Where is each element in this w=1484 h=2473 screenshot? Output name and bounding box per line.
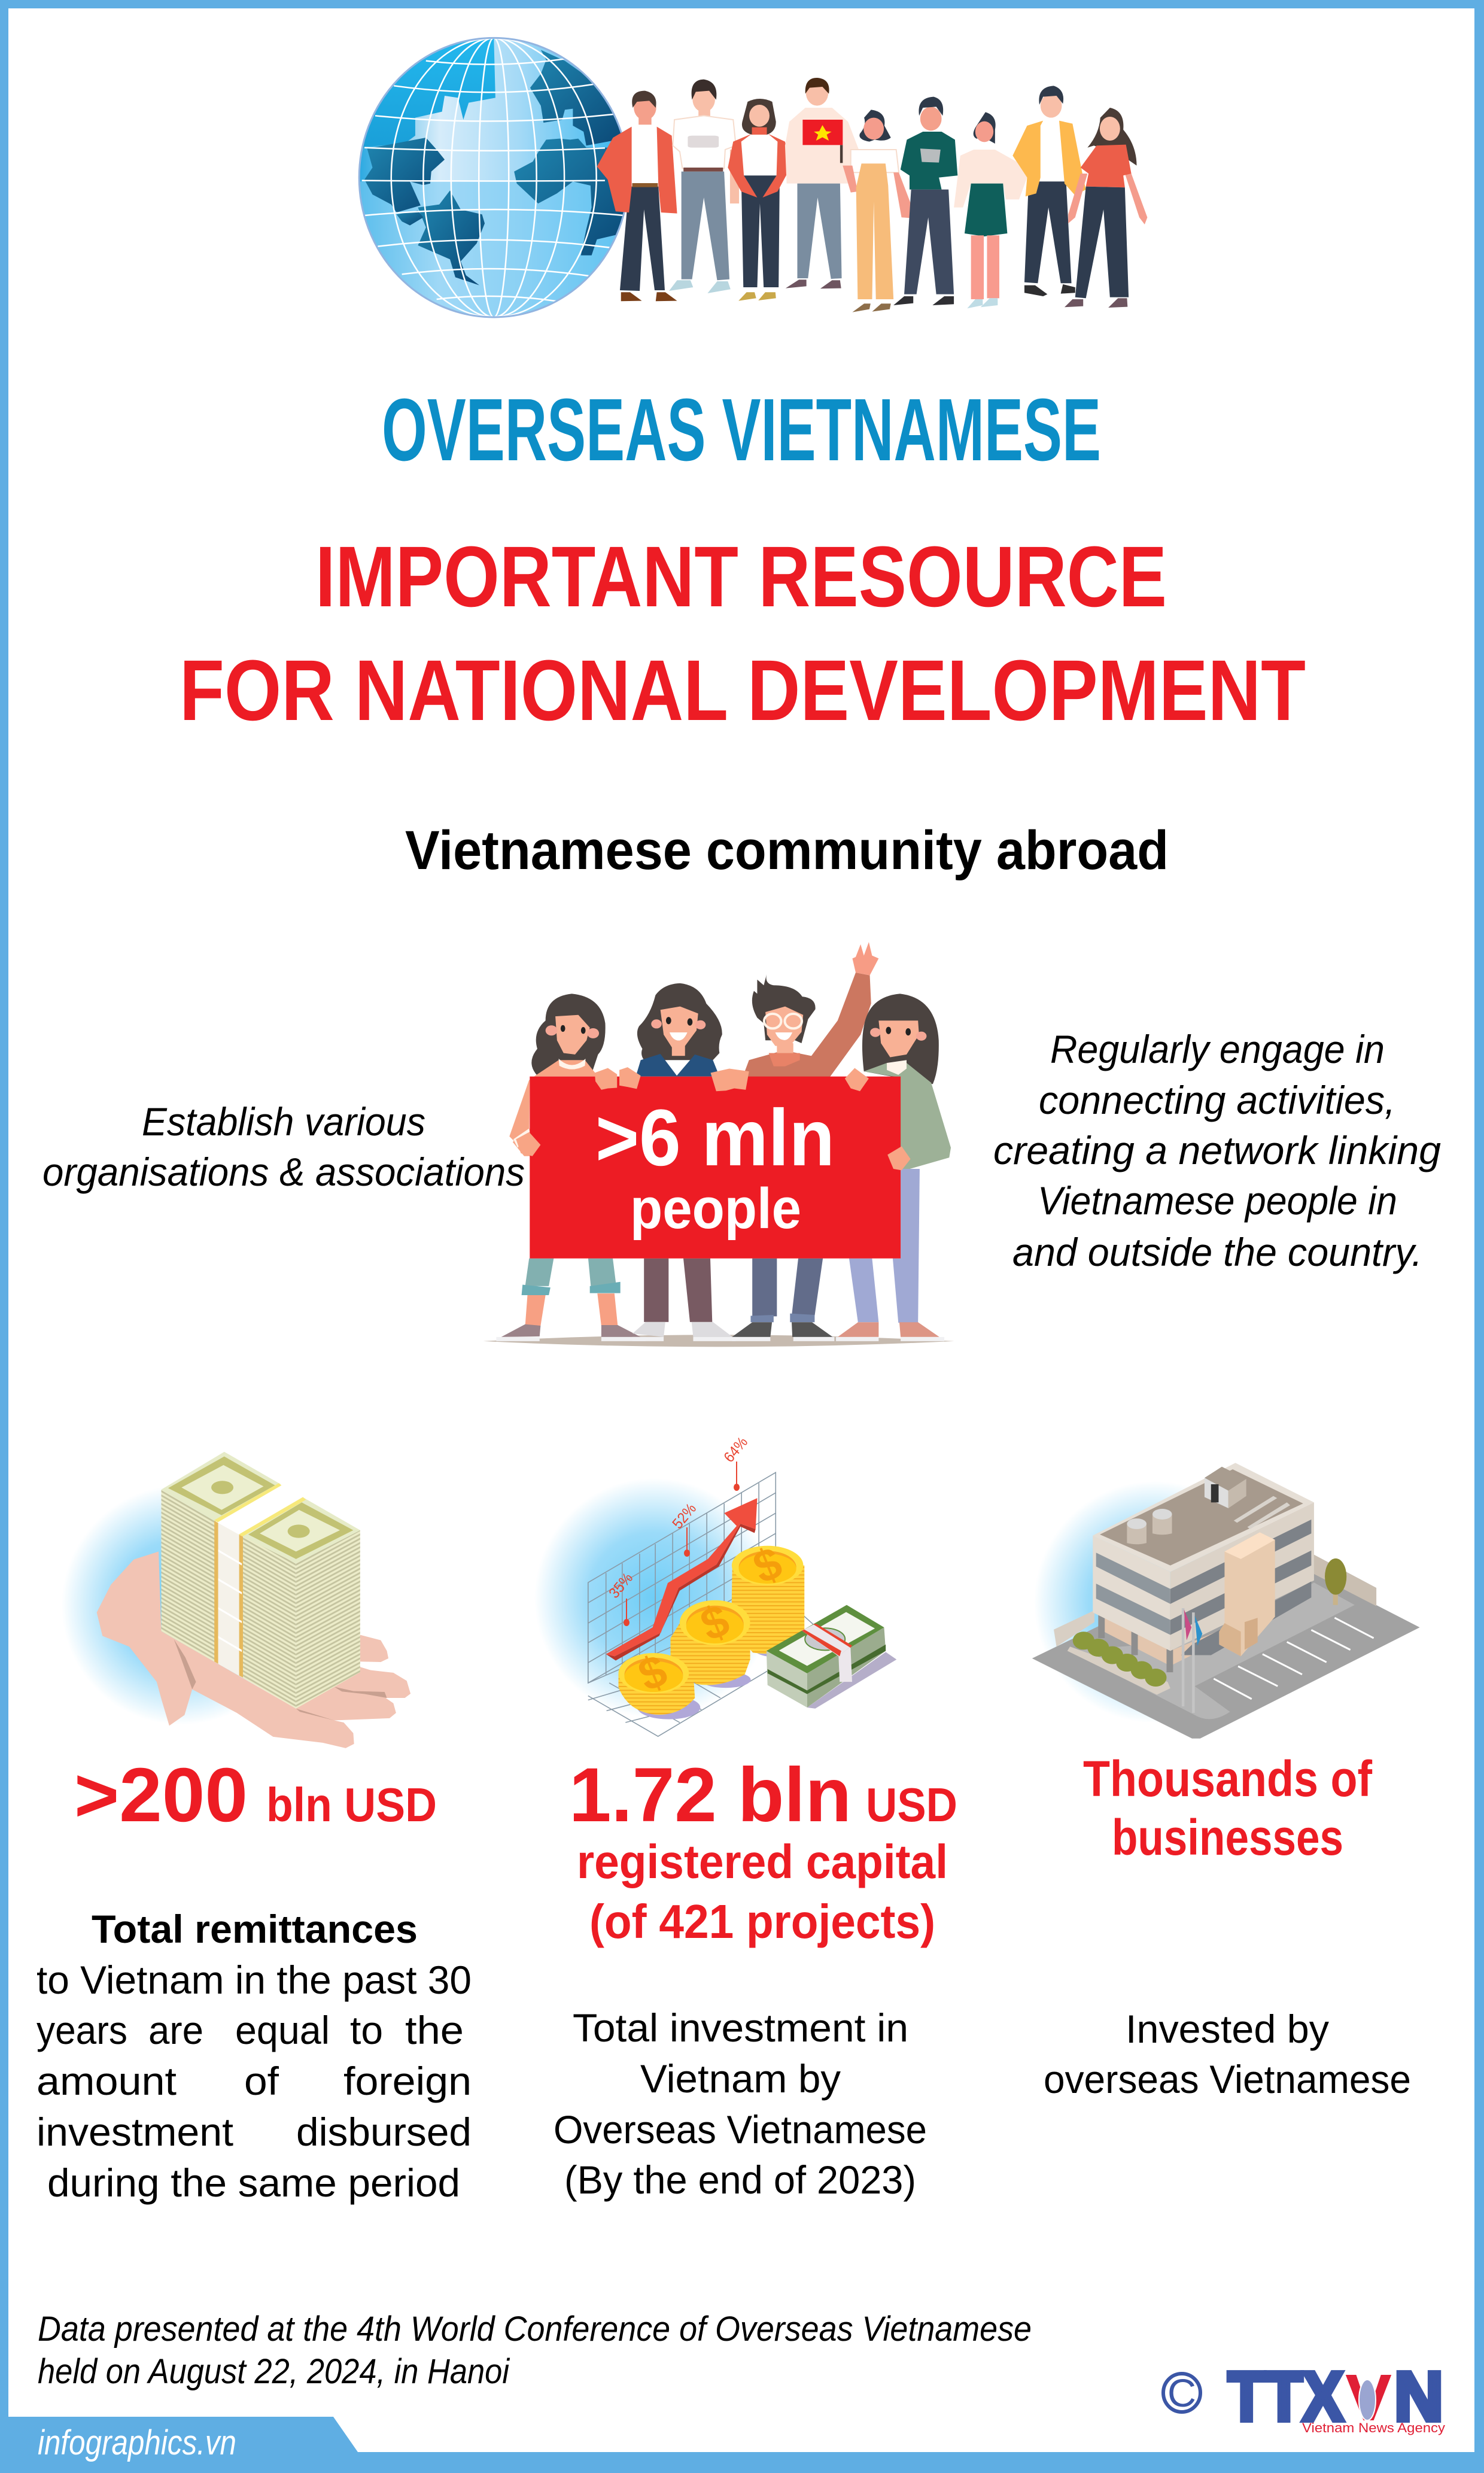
subtitle: IMPORTANT RESOURCE	[315, 528, 1167, 625]
icon: globe	[357, 36, 634, 321]
website label: infographics.vn	[38, 2423, 236, 2462]
icon: hand holding money stack	[97, 1452, 410, 1748]
ground and parking	[1032, 1555, 1420, 1739]
text block: invested by	[1044, 2007, 1411, 2101]
stat: businesses: businesses	[1112, 1809, 1343, 1866]
agency letters: N	[1394, 2357, 1443, 2435]
person 8 yellow jacket	[1012, 86, 1086, 296]
text block: remittances: to	[350, 2008, 383, 2052]
illustration: globe and group of people	[357, 36, 1147, 321]
percent labels: 52%	[669, 1500, 700, 1532]
text block: remittances: are	[148, 2008, 203, 2052]
source note	[38, 2310, 1032, 2391]
title: OVERSEAS VIETNAMESE	[382, 381, 1101, 479]
text block: total investment: Vietnam by	[640, 2056, 841, 2101]
agency letters: TTX	[1228, 2357, 1343, 2435]
stat: businesses	[1083, 1751, 1373, 1866]
illustration: four people holding sign	[483, 942, 954, 1347]
text block: total investment	[554, 2006, 927, 2202]
stat: remittances: >200	[74, 1752, 248, 1838]
text block: connecting activities	[993, 1027, 1441, 1274]
text block: invested by: overseas Vietnamese	[1044, 2057, 1411, 2101]
person 3	[728, 99, 790, 301]
text block: remittances: the	[405, 2008, 464, 2052]
person 5 overalls	[843, 110, 917, 312]
sign text	[595, 1093, 835, 1241]
text block: remittances: to Vietnam in the past 30	[37, 1958, 472, 2002]
footer bar	[0, 2417, 1484, 2473]
text block: remittances: years	[37, 2008, 127, 2052]
chart grid	[588, 1472, 826, 1736]
coin dollar signs: $	[631, 1645, 674, 1702]
person 7 skirt	[954, 112, 1027, 308]
growth arrow	[606, 1498, 757, 1660]
text block: remittances: Total remittances	[92, 1907, 418, 1951]
copyright mark: C	[1167, 2371, 1196, 2415]
stat: remittances: bln USD	[266, 1778, 437, 1831]
cash bundles	[767, 1605, 896, 1709]
person: woman two	[632, 983, 736, 1341]
text block: organisations: organisations & associations	[42, 1150, 525, 1194]
text block: remittances: disbursed	[296, 2110, 472, 2154]
hand	[97, 1551, 410, 1748]
text block: connecting activities: creating a network linking	[993, 1128, 1441, 1172]
planter and bushes	[1068, 1632, 1170, 1695]
coin dollar signs: $	[694, 1594, 736, 1651]
agency letters: V	[1345, 2361, 1392, 2435]
text block: remittances: amount	[37, 2059, 177, 2103]
sign board	[530, 1077, 901, 1259]
glow circles behind icons	[62, 1478, 1276, 1725]
text block: connecting activities: Vietnamese people in	[1038, 1178, 1397, 1223]
person 9 orange tee	[1065, 108, 1147, 308]
percent labels	[606, 1434, 751, 1626]
tree	[1325, 1558, 1346, 1605]
text block: invested by: Invested by	[1126, 2007, 1329, 2051]
subtitle: FOR NATIONAL DEVELOPMENT	[180, 642, 1306, 739]
person: woman four	[836, 994, 951, 1341]
text block: total investment: Overseas Vietnamese	[554, 2107, 927, 2152]
flags	[1182, 1608, 1202, 1713]
source note: held on August 22, 2024, in Hanoi	[38, 2352, 510, 2391]
stat: investment capital: registered capital	[577, 1835, 948, 1888]
money stack	[161, 1452, 360, 1709]
text block: organisations: Establish various	[142, 1099, 425, 1144]
person 4 with flag	[785, 78, 859, 288]
text block: remittances: investment	[37, 2110, 233, 2154]
stat: remittances	[74, 1752, 437, 1838]
text block: organisations	[42, 1099, 525, 1194]
hands on sign	[516, 1067, 911, 1170]
coin dollar signs	[631, 1537, 789, 1702]
text block: connecting activities: and outside the country.	[1012, 1230, 1422, 1274]
text block: remittances: equal	[235, 2008, 330, 2052]
stat: investment capital: 1.72 bln	[569, 1752, 852, 1838]
sign text: >6 mln	[595, 1093, 835, 1183]
percent labels: 35%	[606, 1570, 636, 1602]
text block: connecting activities: Regularly engage in	[1050, 1027, 1385, 1071]
text block: remittances	[37, 1907, 472, 2205]
person 2	[669, 80, 739, 293]
people group	[597, 78, 1147, 312]
icon: office building	[1032, 1463, 1420, 1739]
text block: connecting activities: connecting activities,	[1039, 1078, 1395, 1122]
source note: Data presented at the 4th World Conference of Overseas Vietnamese	[38, 2310, 1032, 2349]
text block: remittances: during the same period	[47, 2161, 460, 2205]
section heading: Vietnamese community abroad	[405, 820, 1169, 881]
text block: remittances: of	[244, 2059, 279, 2103]
text block: remittances: foreign	[343, 2059, 472, 2103]
coin dollar signs: $	[746, 1537, 789, 1594]
text block: total investment: (By the end of 2023)	[564, 2158, 916, 2202]
stat: investment capital	[569, 1752, 957, 1948]
stat: investment capital: (of 421 projects)	[589, 1895, 935, 1948]
person 1	[597, 91, 677, 301]
building body	[1093, 1463, 1314, 1672]
agency letters	[1228, 2357, 1443, 2435]
subtitle	[180, 528, 1306, 739]
percent labels: 64%	[720, 1434, 751, 1466]
icon: growth chart with coins and cash	[588, 1434, 896, 1736]
text block: total investment: Total investment in	[573, 2006, 908, 2050]
sign text: people	[630, 1177, 801, 1241]
stat: investment capital: USD	[866, 1778, 957, 1831]
logo: TTXVN	[1163, 2357, 1445, 2435]
person: man waving	[732, 942, 878, 1341]
coin stacks	[619, 1546, 804, 1719]
stat: businesses: Thousands of	[1083, 1751, 1373, 1807]
person 6 green sweater	[893, 97, 957, 305]
person: woman one	[496, 994, 646, 1341]
agency name: Vietnam News Agency	[1302, 2420, 1445, 2435]
